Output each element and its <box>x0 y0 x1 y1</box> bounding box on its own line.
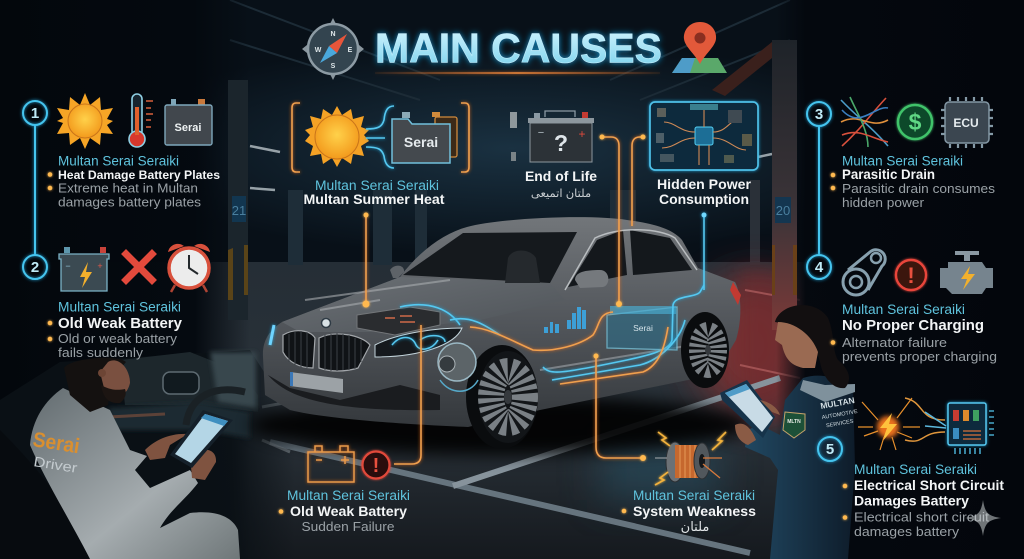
icon: weak battery: − <box>65 261 71 271</box>
in-car battery: Serai <box>633 323 653 333</box>
callout text <box>622 488 756 534</box>
icon: alarm clock <box>168 244 210 292</box>
number badge 4 <box>807 255 831 279</box>
title underline <box>375 72 660 74</box>
leader: old weak battery <box>394 325 421 464</box>
wiring: blue <box>450 285 704 380</box>
icon: spark <box>858 398 920 450</box>
connector 1 to 2 <box>34 125 36 255</box>
icon: wire spool <box>655 442 722 482</box>
tablet <box>170 410 233 468</box>
icon: battery large <box>392 112 457 163</box>
background: parking garage: 20 <box>776 203 790 218</box>
callout: end of life <box>525 111 597 200</box>
text block 2: Old or weak battery <box>58 331 177 346</box>
text block 5: Damages Battery <box>854 494 969 508</box>
callout text: Old Weak Battery <box>290 504 408 519</box>
icon: compass <box>302 18 364 80</box>
leader: end of life <box>600 134 622 307</box>
shirt label: Serai <box>31 428 81 458</box>
callout text: Hidden Power <box>657 176 752 192</box>
icon: alert: ! <box>373 455 379 477</box>
text block 1: Multan Serai Seraiki <box>58 154 179 168</box>
icon: battery Serai: Serai <box>175 122 201 134</box>
icon: compass: W <box>315 47 322 54</box>
icon: battery question <box>528 111 594 162</box>
headlight <box>375 328 462 357</box>
leader: system weakness <box>594 354 646 461</box>
icon: ECU chip: ECU <box>953 116 979 130</box>
icon: battery Serai <box>165 99 212 145</box>
callout text <box>304 178 445 207</box>
panel: cause 4 no proper charging <box>807 250 997 364</box>
text block 1: damages battery plates <box>58 194 201 210</box>
number badge 5: 5 <box>826 441 834 458</box>
icon: compass: E <box>348 47 353 54</box>
number badge 4: 4 <box>815 259 824 276</box>
text block 1: Heat Damage Battery Plates <box>58 168 220 182</box>
icon: engine <box>940 251 993 294</box>
panel: cause 5 short circuit <box>818 398 1004 539</box>
icon: sun large <box>305 106 369 167</box>
callout text <box>279 488 410 534</box>
sparkle mark <box>965 500 1001 536</box>
engine block <box>357 305 460 335</box>
callout: Multan summer heat <box>292 103 469 207</box>
icon: battery outline <box>308 446 354 482</box>
shirt label: Driver <box>33 453 79 476</box>
roof highlight <box>565 230 697 290</box>
icon: dollar <box>898 105 932 139</box>
icon: compass: N <box>330 31 336 38</box>
illustration: mechanic with tablet <box>720 305 859 559</box>
alternator <box>438 343 478 391</box>
icon: battery large: Serai <box>404 134 438 150</box>
icon: map pin <box>672 22 727 73</box>
heat connectors <box>366 106 394 168</box>
text block 4: Alternator failure <box>842 335 947 350</box>
lower bumper <box>268 375 440 410</box>
license plate <box>290 372 343 393</box>
leader: hidden power orange <box>632 134 646 226</box>
text block 5 <box>843 462 1004 539</box>
text block 2: Old Weak Battery <box>58 316 182 332</box>
leader: summer heat <box>362 212 370 308</box>
text block 4 <box>831 302 997 364</box>
text block 4: No Proper Charging <box>842 318 984 334</box>
icon: warning <box>896 260 926 290</box>
windshield <box>403 232 577 283</box>
callout text: Multan Serai Seraiki <box>633 488 755 503</box>
callout text: Multan Serai Seraiki <box>315 178 439 193</box>
door charts <box>544 307 586 333</box>
text block 2: Multan Serai Seraiki <box>58 300 181 314</box>
badge: MLTN <box>787 419 801 425</box>
icon: alternator belt <box>843 250 885 295</box>
man: hands <box>145 434 216 480</box>
tail light <box>730 282 741 305</box>
leader lines <box>362 134 706 464</box>
text block 5: Electrical short circuit <box>854 510 989 524</box>
text block 1 <box>48 154 220 210</box>
callout text <box>657 176 752 207</box>
callout text: Consumption <box>659 191 749 207</box>
text block 3: Multan Serai Seraiki <box>842 154 963 168</box>
icon: battery question: − <box>538 127 544 139</box>
car body <box>263 217 740 427</box>
title <box>302 18 727 80</box>
back print <box>820 395 859 429</box>
number badge 3 <box>807 102 831 126</box>
number badge 1 <box>23 101 47 125</box>
text block 4: Multan Serai Seraiki <box>842 302 965 317</box>
brackets <box>292 103 469 172</box>
illustration: driver with tablet <box>0 350 295 559</box>
text block 5: damages battery <box>854 524 959 539</box>
front wheel <box>466 345 538 449</box>
callout: old weak battery bottom <box>279 446 410 534</box>
hand <box>735 400 780 445</box>
background: parking garage: 21 <box>232 203 246 218</box>
icon: ECU chip <box>941 97 993 148</box>
text block 3 <box>831 154 995 210</box>
icon: battery question: + <box>578 127 586 141</box>
text block 1: Extreme heat in Multan <box>58 180 198 196</box>
number badge 2 <box>23 255 47 279</box>
wires <box>905 398 945 441</box>
back print: AUTOMOTIVE <box>821 409 859 421</box>
text block 3: hidden power <box>842 195 925 210</box>
text block 5: Multan Serai Seraiki <box>854 462 977 477</box>
wiring: orange <box>470 312 668 384</box>
panel: cause 2 old weak battery <box>23 244 210 360</box>
heading: MAIN CAUSES: MAIN CAUSES <box>375 24 662 72</box>
callout text: Multan Summer Heat <box>304 191 445 207</box>
side windows <box>568 230 692 287</box>
callout text: Multan Serai Seraiki <box>287 488 410 503</box>
text block 2: fails suddenly <box>58 345 143 360</box>
front seat <box>505 250 540 283</box>
callout text: Sudden Failure <box>302 519 394 534</box>
callout text: ملتان اتمیعی <box>531 188 591 200</box>
icon: circuit board <box>650 102 758 170</box>
leader: hidden power blue <box>702 212 706 290</box>
logo <box>322 318 330 328</box>
man: shirt <box>30 388 240 559</box>
icon: dollar: $ <box>909 109 922 135</box>
icon: fuse box <box>948 403 994 454</box>
number badge 1: 1 <box>31 105 39 122</box>
panel: cause 1 heat damage <box>23 93 220 255</box>
icon: battery question: ? <box>554 130 568 156</box>
icon: weak battery <box>59 247 109 291</box>
collar stripe <box>800 380 855 402</box>
badge <box>783 412 805 438</box>
icon: sun <box>57 93 113 149</box>
callout text: ملتان <box>681 519 709 534</box>
number badge 5 <box>818 437 842 461</box>
icon: sparks <box>655 432 726 485</box>
icon: thermometer <box>129 94 153 147</box>
back print: SERVICES <box>826 419 854 429</box>
head <box>775 305 849 388</box>
icon: tangled wires <box>841 97 888 147</box>
icon: compass: S <box>331 63 336 70</box>
in-car battery <box>607 306 677 350</box>
hood <box>282 277 565 332</box>
man: head <box>64 358 130 412</box>
shirt label <box>31 428 81 476</box>
text block 2 <box>48 300 182 360</box>
number badge 3: 3 <box>815 106 823 123</box>
callout: hidden power consumption <box>650 102 758 207</box>
icon: weak battery: + <box>97 261 103 271</box>
text block 3: Parasitic Drain <box>842 167 935 182</box>
text block 5: Electrical Short Circuit <box>854 478 1004 493</box>
icon: warning: ! <box>907 263 915 288</box>
panel: cause 3 parasitic drain <box>807 97 995 255</box>
callout text: System Weakness <box>633 503 756 519</box>
text block 4: prevents proper charging <box>842 349 997 364</box>
icon: red X <box>126 254 152 280</box>
back print: MULTAN <box>820 395 855 411</box>
car interior <box>0 350 295 559</box>
connector 3 to 4 <box>818 126 820 255</box>
grille <box>283 331 370 371</box>
number badge 2: 2 <box>31 259 39 276</box>
mirror <box>575 270 608 288</box>
coverall <box>745 376 855 559</box>
rear wheel <box>681 312 729 388</box>
callout: system weakness <box>622 432 756 534</box>
callout text <box>525 168 597 200</box>
text block 3: Parasitic drain consumes <box>842 181 995 196</box>
callout text: End of Life <box>525 168 597 184</box>
tablet <box>720 380 775 438</box>
illustration: BMW car <box>250 217 750 455</box>
car shadow <box>250 395 750 455</box>
